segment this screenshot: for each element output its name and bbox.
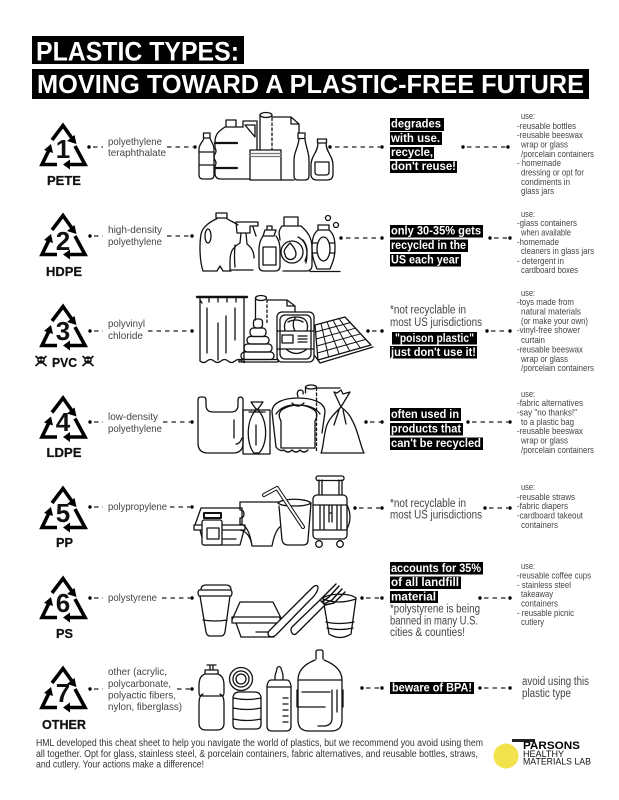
use list: -reusable beeswax	[517, 130, 583, 141]
middle connector and callout	[360, 562, 483, 639]
use list: -reusable bottles	[517, 121, 576, 132]
use list: takeaway	[521, 589, 553, 600]
middle connector and callout: just don't use it!	[390, 347, 476, 359]
label HDPE: HDPE	[46, 264, 82, 279]
use list: cutlery	[521, 617, 544, 628]
recycling symbol 7: 7	[56, 678, 70, 708]
name connector	[87, 136, 197, 159]
middle connector and callout: only 30-35% gets	[391, 226, 481, 238]
use list: use:	[521, 561, 535, 572]
right connector	[478, 596, 512, 600]
name connector	[88, 501, 194, 513]
use list: use:	[521, 209, 535, 220]
use list	[517, 288, 594, 374]
middle connector and callout	[339, 225, 483, 266]
use list: -cardboard takeout	[517, 510, 583, 522]
name connector: high-density	[108, 224, 163, 236]
middle connector and callout: don't reuse!	[391, 161, 456, 173]
name connector	[88, 592, 194, 604]
use list: -toys made from	[517, 297, 574, 308]
use list: - reusable picnic	[517, 608, 574, 619]
use list: /porcelain containers	[521, 149, 594, 160]
middle connector and callout: can't be recycled	[391, 438, 481, 450]
footer note: all together. Opt for glass, stainless steel, & porcelain containers, fabric alternatives, and reusable bottles, straws,	[36, 749, 478, 760]
recycling symbol 5	[42, 488, 85, 532]
use list: -homemade	[517, 237, 559, 248]
use list: -reusable beeswax	[517, 344, 583, 356]
name connector: polyvinyl	[108, 318, 145, 330]
recycling symbol 2	[42, 216, 85, 260]
middle connector and callout: banned in many U.S.	[390, 616, 478, 628]
middle connector and callout: recycle,	[391, 147, 433, 159]
use list: - detergent in	[517, 256, 564, 267]
use list: -vinyl-free shower	[517, 325, 580, 336]
label PP: PP	[56, 535, 73, 550]
label LDPE: LDPE	[46, 445, 82, 460]
right connector	[466, 420, 512, 424]
row 1: PETE	[42, 111, 594, 197]
icons: bottles, jug, wrap, box	[199, 112, 333, 180]
name connector: polystyrene	[108, 592, 157, 604]
icons: bags and bread	[198, 385, 364, 454]
label PVC with skulls: PVC	[52, 355, 78, 370]
row 3: PVC	[36, 288, 594, 374]
middle connector and callout: material	[391, 592, 436, 604]
name connector: polycarbonate,	[108, 678, 171, 690]
footer note: and cutlery. Your actions make a difference!	[36, 760, 204, 770]
use list: -glass containers	[517, 218, 577, 229]
use list: use:	[521, 482, 535, 493]
use list: -say "no thanks!"	[517, 408, 577, 418]
name connector	[88, 666, 194, 713]
use list: cardboard boxes	[521, 265, 578, 276]
logo: Parsons Healthy Materials Lab: PARSONS	[523, 740, 580, 752]
middle connector and callout: often used in	[391, 409, 459, 421]
middle connector and callout: cities & counties!	[390, 627, 465, 639]
name connector: polyethylene	[108, 236, 162, 248]
middle connector and callout	[328, 118, 457, 173]
use list: use:	[521, 389, 535, 400]
use list: wrap or glass	[520, 354, 568, 365]
use list: (or make your own)	[521, 316, 588, 327]
name connector: polypropylene	[108, 501, 167, 513]
name connector	[88, 318, 194, 342]
name connector: teraphthalate	[108, 147, 166, 159]
use list: condiments in	[521, 177, 570, 188]
middle connector and callout: degrades	[391, 118, 441, 130]
name connector: polyethylene	[108, 136, 162, 148]
use list: cleaners in glass jars	[521, 246, 594, 257]
middle connector and callout	[366, 304, 482, 359]
icons: jug, spray, dish soap, detergent, shampoo	[200, 213, 340, 272]
row 7: OTHER	[42, 650, 589, 732]
name connector: polyactic fibers,	[108, 690, 176, 702]
use list	[517, 209, 594, 276]
middle connector and callout: *not recyclable in	[390, 304, 466, 316]
footer note	[36, 738, 483, 770]
icons: curtain, rings, wrap, food tray, mat	[197, 296, 373, 363]
middle connector and callout: recycled in the	[391, 240, 466, 252]
middle connector and note	[353, 498, 482, 522]
use list: curtain	[521, 335, 545, 346]
row 5: PP	[42, 476, 583, 550]
row 2: HDPE	[42, 209, 594, 279]
use list: -reusable straws	[517, 492, 575, 503]
middle connector and callout: with use.	[390, 133, 440, 145]
use list: - homemade	[517, 158, 561, 169]
recycling symbol 2: 2	[56, 226, 70, 256]
middle connector and note: most US jurisdictions	[390, 510, 482, 522]
icons: coffee cup, clamshell, knife, cup, fork	[198, 584, 356, 638]
logo: Parsons Healthy Materials Lab	[494, 739, 591, 768]
middle connector and callout: *polystyrene is being	[390, 604, 480, 616]
right connector	[488, 236, 512, 240]
icons: sports bottle, tape, can, baby bottle, water jug	[199, 650, 343, 731]
use list: use:	[521, 111, 535, 122]
recycling symbol 4: 4	[56, 407, 71, 437]
use list: containers	[521, 520, 558, 531]
recycling symbol 7	[42, 668, 85, 712]
icons: tray, jar, diaper, cup, suitcase	[194, 476, 350, 547]
right connector	[485, 329, 512, 333]
right connector	[483, 506, 512, 510]
advice text	[522, 676, 589, 700]
use list: /porcelain containers	[521, 445, 594, 456]
name connector: other (acrylic,	[108, 666, 167, 678]
label PETE: PETE	[47, 173, 81, 188]
name connector: nylon, fiberglass)	[108, 701, 182, 713]
recycling symbol 1: 1	[56, 134, 70, 164]
use list: - stainless steel	[517, 580, 571, 591]
recycling symbol 1	[42, 126, 85, 170]
use list: -reusable beeswax	[517, 426, 583, 437]
name connector: chloride	[108, 330, 143, 342]
use list: /porcelain containers	[521, 363, 594, 374]
recycling symbol 4	[42, 398, 85, 442]
name connector: low-density	[108, 411, 159, 423]
footer note: HML developed this cheat sheet to help you navigate the world of plastics, but we recommend you avoid using them	[36, 738, 483, 749]
icon: skull and crossbones right	[82, 356, 94, 366]
advice text: avoid using this	[522, 676, 589, 688]
use list: to a plastic bag	[521, 417, 574, 428]
name connector	[88, 411, 194, 435]
middle connector and callout: US each year	[391, 254, 459, 266]
label PS: PS	[56, 626, 73, 641]
use list	[517, 482, 583, 531]
use list: wrap or glass	[520, 436, 568, 446]
logo: Parsons Healthy Materials Lab: HEALTHY	[523, 749, 564, 759]
use list	[517, 561, 591, 628]
middle connector and callout: most US jurisdictions	[390, 317, 482, 329]
use list: glass jars	[521, 186, 554, 197]
logo: Parsons Healthy Materials Lab: MATERIALS LAB	[523, 756, 591, 766]
use list: wrap or glass	[520, 140, 568, 150]
use list: natural materials	[521, 306, 581, 318]
use list: -reusable coffee cups	[517, 570, 591, 582]
row 6: PS	[42, 561, 591, 641]
title: MOVING TOWARD A PLASTIC-FREE FUTURE	[37, 69, 584, 99]
title: PLASTIC TYPES:	[36, 36, 239, 66]
use list: use:	[521, 288, 535, 299]
name connector	[88, 224, 194, 248]
recycling symbol 5: 5	[56, 498, 70, 528]
use list	[517, 111, 594, 197]
icon: skull and crossbones left	[36, 356, 46, 366]
label PVC with skulls	[36, 355, 94, 370]
use list: when available	[520, 228, 571, 238]
middle connector and callout: accounts for 35%	[391, 563, 481, 575]
recycling symbol 6: 6	[56, 588, 70, 618]
middle connector and note: *not recyclable in	[390, 498, 466, 510]
use list	[517, 389, 594, 456]
middle connector and callout: of all landfill	[391, 577, 459, 589]
right connector	[478, 686, 512, 690]
recycling symbol 3	[42, 306, 85, 350]
row 4: LDPE	[42, 385, 594, 460]
right connector	[461, 145, 510, 149]
use list: containers	[521, 598, 558, 610]
middle connector and callout: beware of BPA!	[392, 682, 472, 694]
use list: -fabric diapers	[517, 501, 568, 512]
middle connector and callout: "poison plastic"	[395, 333, 474, 345]
title	[32, 36, 589, 99]
recycling symbol 6	[42, 578, 85, 622]
middle connector and callout: products that	[391, 424, 461, 436]
use list: -fabric alternatives	[517, 398, 583, 409]
recycling symbol 3: 3	[56, 316, 70, 346]
label OTHER: OTHER	[42, 717, 87, 732]
middle connector and callout	[364, 408, 483, 450]
advice text: plastic type	[522, 688, 571, 700]
use list: dressing or opt for	[521, 168, 584, 178]
name connector: polyethylene	[108, 423, 162, 435]
middle connector and callout	[360, 682, 474, 694]
